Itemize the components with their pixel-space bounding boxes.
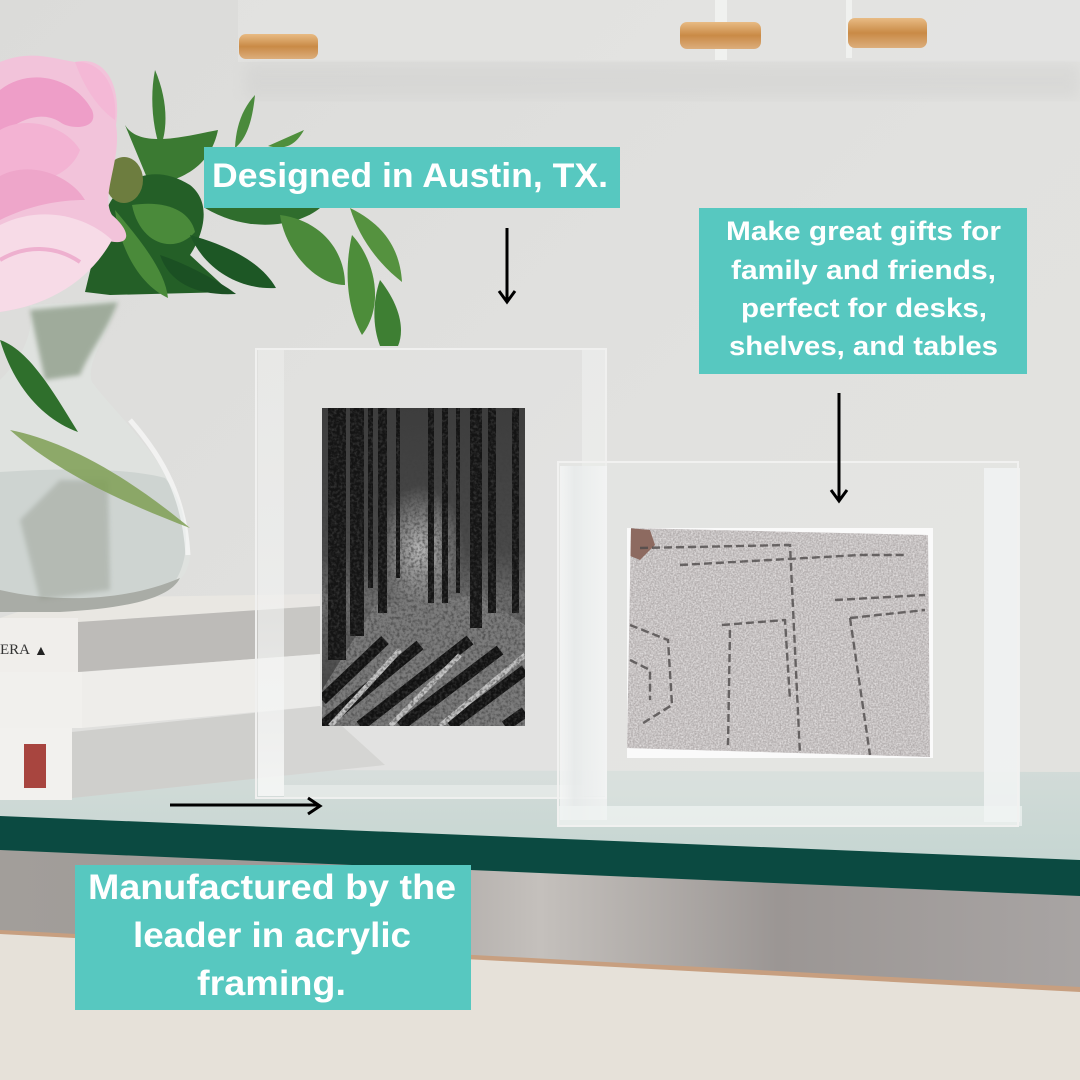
leaves bbox=[0, 70, 402, 528]
wall-mounted shelf with gold pegs bbox=[238, 0, 1080, 98]
callout: gifts bbox=[699, 208, 1027, 374]
right acrylic frame bbox=[558, 462, 1022, 826]
photo: woven textile bbox=[627, 528, 933, 758]
glass vase bbox=[0, 300, 190, 612]
callout: manufactured bbox=[75, 865, 471, 1010]
photo: black and white forest bbox=[322, 408, 525, 726]
callout: manufactured: framing. bbox=[197, 964, 346, 1003]
callout: designed in Austin bbox=[204, 147, 620, 208]
stack of books: ERA bbox=[0, 642, 30, 658]
arrow: manufactured bbox=[170, 798, 320, 814]
callout: manufactured: Manufactured by the bbox=[88, 868, 456, 907]
callout: gifts: Make great gifts for bbox=[726, 216, 1002, 246]
arrow: designed in Austin bbox=[499, 228, 515, 302]
callout: gifts: shelves, and tables bbox=[729, 331, 998, 361]
stack of books bbox=[0, 594, 385, 800]
stack of books: ▲ bbox=[34, 642, 48, 658]
callout: manufactured: leader in acrylic bbox=[133, 916, 411, 955]
callout: gifts: perfect for desks, bbox=[741, 293, 987, 323]
arrow: gifts bbox=[831, 393, 847, 501]
callout: designed in Austin: Designed in Austin, TX. bbox=[212, 157, 608, 195]
table: console below glass bbox=[0, 770, 1080, 1080]
left acrylic frame bbox=[256, 349, 606, 799]
pink peony flower bbox=[0, 56, 126, 312]
callout: gifts: family and friends, bbox=[731, 255, 996, 285]
